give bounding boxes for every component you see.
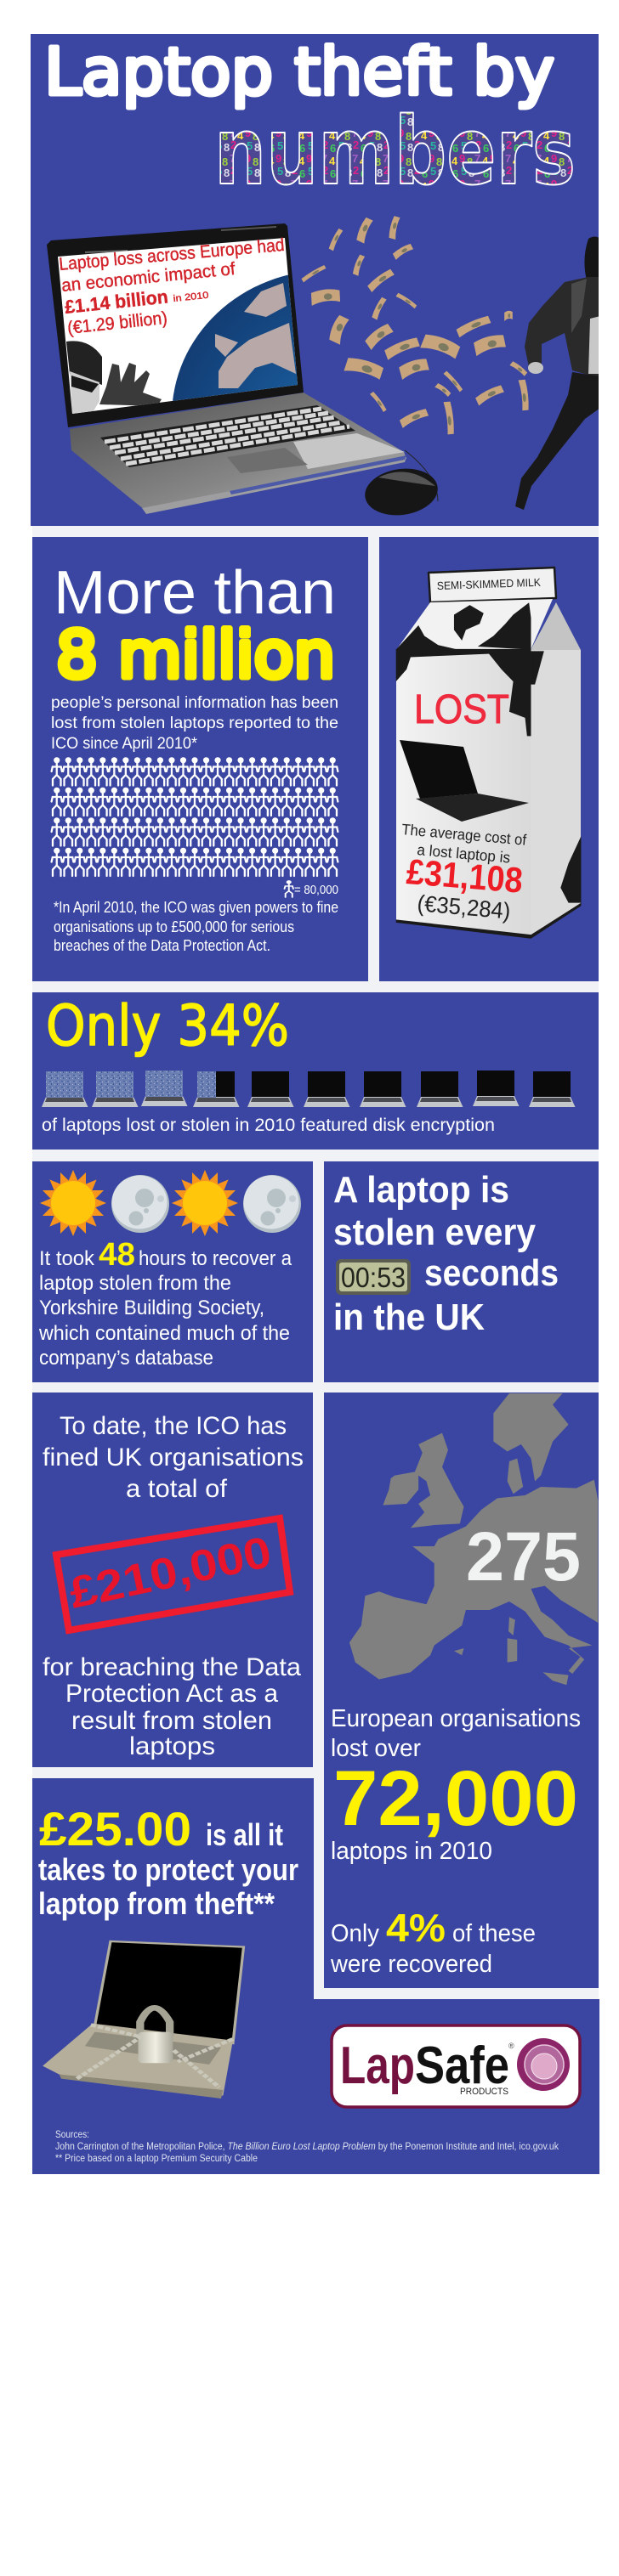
pictogram: 100 people xyxy=(52,757,338,876)
logo: LapSafe xyxy=(332,2025,580,2107)
text block: recovery xyxy=(38,1237,292,1370)
footnote xyxy=(54,899,338,954)
heading: more than: More than xyxy=(54,559,336,627)
text block: recovery: company’s database xyxy=(39,1347,213,1370)
logo: LapSafe: PRODUCTS xyxy=(460,2087,508,2097)
sources xyxy=(55,2130,559,2164)
screen text xyxy=(58,235,285,338)
screen text: in 2010 xyxy=(173,291,209,304)
icons: sun and moon xyxy=(40,1170,301,1236)
text block: in the UK xyxy=(333,1296,485,1338)
legend xyxy=(285,880,338,897)
illustration: running thief xyxy=(515,236,600,510)
text block: to date: fined UK organisations xyxy=(43,1443,304,1472)
illustration: chained laptop xyxy=(43,1941,243,2099)
text block: breaching: laptops xyxy=(129,1732,215,1760)
text block: 25 pounds: takes to protect your xyxy=(38,1852,298,1887)
footnote: breaches of the Data Protection Act. xyxy=(54,937,270,954)
text block: 25 pounds xyxy=(38,1802,298,1921)
logo: LapSafe: Lap xyxy=(340,2037,415,2095)
stamp: 210,000 xyxy=(56,1518,290,1630)
text block: recovery: Yorkshire Building Society, xyxy=(39,1296,264,1319)
text block: only 4% xyxy=(330,1906,536,1978)
text block: laptops in 2010: laptops in 2010 xyxy=(331,1838,492,1865)
stat: 72,000: 72,000 xyxy=(333,1755,578,1842)
stamp: 210,000: £210,000 xyxy=(65,1528,275,1618)
panel: ICO fines xyxy=(32,1393,313,1767)
panel: milk carton xyxy=(379,537,599,981)
text block: breaching xyxy=(43,1653,301,1760)
panel: only 34% xyxy=(32,992,599,1150)
text block: intro: ICO since April 2010* xyxy=(51,735,198,753)
text block: recovery: 48 xyxy=(99,1237,135,1273)
icon: mouse xyxy=(362,450,440,520)
screen text: (€1.29 billion) xyxy=(66,308,168,338)
carton label: SEMI-SKIMMED MILK xyxy=(437,576,541,592)
text block: to date xyxy=(43,1412,304,1503)
text block: breaching: for breaching the Data xyxy=(43,1653,301,1681)
text block: intro: people’s personal information has been xyxy=(51,694,338,712)
carton heading: LOST xyxy=(414,687,509,732)
sources: Sources: xyxy=(55,2130,89,2140)
text block: European organisations xyxy=(331,1705,581,1762)
text block: 25 pounds: £25.00 xyxy=(39,1802,191,1856)
screen text: £1.14 billion xyxy=(64,285,169,318)
text block: only 4%: 4% xyxy=(386,1906,446,1950)
row of ten laptops xyxy=(42,1071,575,1107)
illustration: carton xyxy=(396,568,581,939)
stat: 8 million: 8 million xyxy=(56,617,335,692)
footnote: organisations up to £500,000 for serious xyxy=(54,918,294,935)
text block: to date: a total of xyxy=(126,1475,228,1503)
footnote: *In April 2010, the ICO was given powers to fine xyxy=(54,899,338,916)
text block: 25 pounds: laptop from theft** xyxy=(38,1886,275,1921)
screen: Europe of banknotes xyxy=(215,283,296,388)
title: Laptop theft by xyxy=(44,35,554,110)
map: Europe xyxy=(349,1393,598,1685)
logo: LapSafe: Safe xyxy=(415,2037,509,2095)
text block: European organisations: lost over xyxy=(331,1735,421,1762)
panel: hero xyxy=(31,34,600,562)
carton text: The average cost of xyxy=(401,821,528,849)
legend: = 80,000 xyxy=(294,884,338,897)
text block: stolen every xyxy=(333,1212,536,1253)
screen text: Laptop loss across Europe had xyxy=(58,235,285,274)
illustration: laptop xyxy=(47,223,406,514)
text block: recovery: It took xyxy=(39,1247,95,1270)
text block: only 4%: Only xyxy=(331,1920,379,1947)
carton text xyxy=(401,821,528,924)
text block: European organisations: European organisations xyxy=(331,1705,581,1732)
stat: only 34%: Only 34% xyxy=(46,993,289,1059)
carton text: £31,108 xyxy=(405,851,525,901)
caption: of laptops lost or stolen in 2010 featured disk encryption xyxy=(42,1116,495,1135)
page background band xyxy=(32,526,599,2174)
panel: 8 million xyxy=(32,537,368,981)
text block: breaching: Protection Act as a xyxy=(65,1680,278,1708)
panel: 48 hours xyxy=(32,1161,313,1382)
text block: recovery: laptop stolen from the xyxy=(39,1272,231,1295)
logo: LapSafe: ® xyxy=(508,2042,514,2050)
carton text: (€35,284) xyxy=(416,890,512,924)
panel: Europe xyxy=(324,1393,599,1988)
panel: stolen every 53 seconds xyxy=(324,1161,599,1382)
text block: breaching: result from stolen xyxy=(71,1707,272,1735)
carton text: a lost laptop is xyxy=(417,841,511,867)
text block: to date: To date, the ICO has xyxy=(60,1412,287,1440)
stat: 275: 275 xyxy=(466,1518,581,1596)
icon: digital timer: 00:53 xyxy=(341,1262,406,1293)
panel: protect and logo xyxy=(32,1778,599,2174)
text block: 25 pounds: is all it xyxy=(206,1817,283,1852)
text block xyxy=(333,1169,559,1338)
text block: A laptop is xyxy=(333,1169,509,1211)
flying banknotes xyxy=(301,216,530,435)
text block: seconds xyxy=(424,1252,559,1294)
text block: only 4%: of these xyxy=(452,1920,536,1947)
text block: intro xyxy=(51,694,338,753)
text block: recovery: which contained much of the xyxy=(38,1322,290,1345)
screen text: an economic impact of xyxy=(60,259,236,296)
text block: recovery: hours to recover a xyxy=(139,1247,292,1270)
screen: masked thief xyxy=(66,341,162,414)
text block: intro: lost from stolen laptops reported to the xyxy=(51,715,338,732)
icon: black laptop xyxy=(400,740,529,822)
sources: John Carrington of the Metropolitan Police, The Billion Euro Lost Laptop Problem by the Ponemon Institute and Intel, ico.gov.uk xyxy=(55,2142,559,2152)
text block: only 4%: were recovered xyxy=(330,1951,492,1978)
sources: ** Price based on a laptop Premium Security Cable xyxy=(55,2154,258,2164)
